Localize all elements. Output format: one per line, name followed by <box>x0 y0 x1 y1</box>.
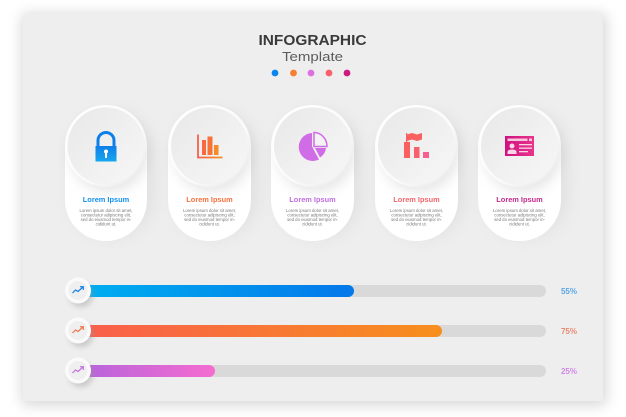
label 55%: 55% <box>561 287 577 296</box>
card 4 body text <box>390 208 443 226</box>
subtitle: Template <box>282 49 343 64</box>
card 2 heading: Lorem Ipsum <box>186 195 233 204</box>
title: INFOGRAPHIC <box>258 32 367 49</box>
card 2 body text: consectetur adipiscing elit, <box>184 212 235 218</box>
card 2: bar chart <box>168 105 257 241</box>
card 2 body text: Lorem ipsum dolor sit amet, <box>183 208 236 213</box>
card 4 body text: consectetur adipiscing elit, <box>391 212 442 218</box>
icon: pie chart <box>299 132 327 161</box>
card 5 heading: Lorem Ipsum <box>496 195 543 204</box>
card 3 body text: consectetur adipiscing elit, <box>287 212 338 218</box>
card 5: ID card <box>478 105 567 241</box>
card 5 body text: sed do eiusmod tempor in- <box>494 217 546 222</box>
card 1 body text: sed do eiusmod tempor in- <box>81 217 132 222</box>
progress bar: 55% <box>65 278 546 307</box>
icon: trend arrow purple <box>72 367 83 373</box>
card 4: flag <box>375 105 464 241</box>
card 4 body text: sed do eiusmod tempor in- <box>391 217 443 222</box>
icon: ID card <box>505 136 534 156</box>
label 75%: 75% <box>561 327 577 336</box>
colour dots <box>272 70 350 76</box>
label 25%: 25% <box>561 367 577 376</box>
card 3 body text: sed do eiusmod tempor in- <box>287 217 339 222</box>
card 3 body text: cididunt ut. <box>302 222 323 226</box>
icon: bar chart <box>198 134 222 158</box>
card 4 body text: cididunt ut. <box>406 222 427 226</box>
card 2 body text <box>183 208 236 226</box>
card 1 body text: Lorem ipsum dolor sit amet, <box>79 208 133 213</box>
card 5 body text: consectetur adipiscing elit, <box>494 212 545 218</box>
card 1: lock <box>65 105 153 241</box>
icon: flag on bars <box>404 133 429 158</box>
card 4 heading: Lorem Ipsum <box>393 195 440 204</box>
card 4 body text: Lorem ipsum dolor sit amet, <box>390 208 443 213</box>
card 1 body text <box>79 208 133 226</box>
card 1 body text: cididunt ut. <box>96 222 116 226</box>
card 1 heading: Lorem Ipsum <box>83 195 130 204</box>
progress bar: 25% <box>65 358 546 387</box>
card 1 body text: consectetur adipiscing elit, <box>81 212 131 218</box>
card 3 body text: Lorem ipsum dolor sit amet, <box>286 208 339 213</box>
card 3 heading: Lorem Ipsum <box>289 195 336 204</box>
icon: trend arrow blue <box>72 287 83 293</box>
icon: trend arrow orange <box>72 327 83 333</box>
card 5 body text <box>493 208 546 226</box>
progress bar: 75% <box>65 318 546 347</box>
card 2 body text: sed do eiusmod tempor in- <box>184 217 236 222</box>
icon: padlock <box>96 132 116 162</box>
card 3 body text <box>286 208 339 226</box>
card 5 body text: Lorem ipsum dolor sit amet, <box>493 208 546 213</box>
card 3: pie chart <box>271 105 360 241</box>
card 5 body text: cididunt ut. <box>509 222 530 226</box>
card 2 body text: cididunt ut. <box>199 222 220 226</box>
